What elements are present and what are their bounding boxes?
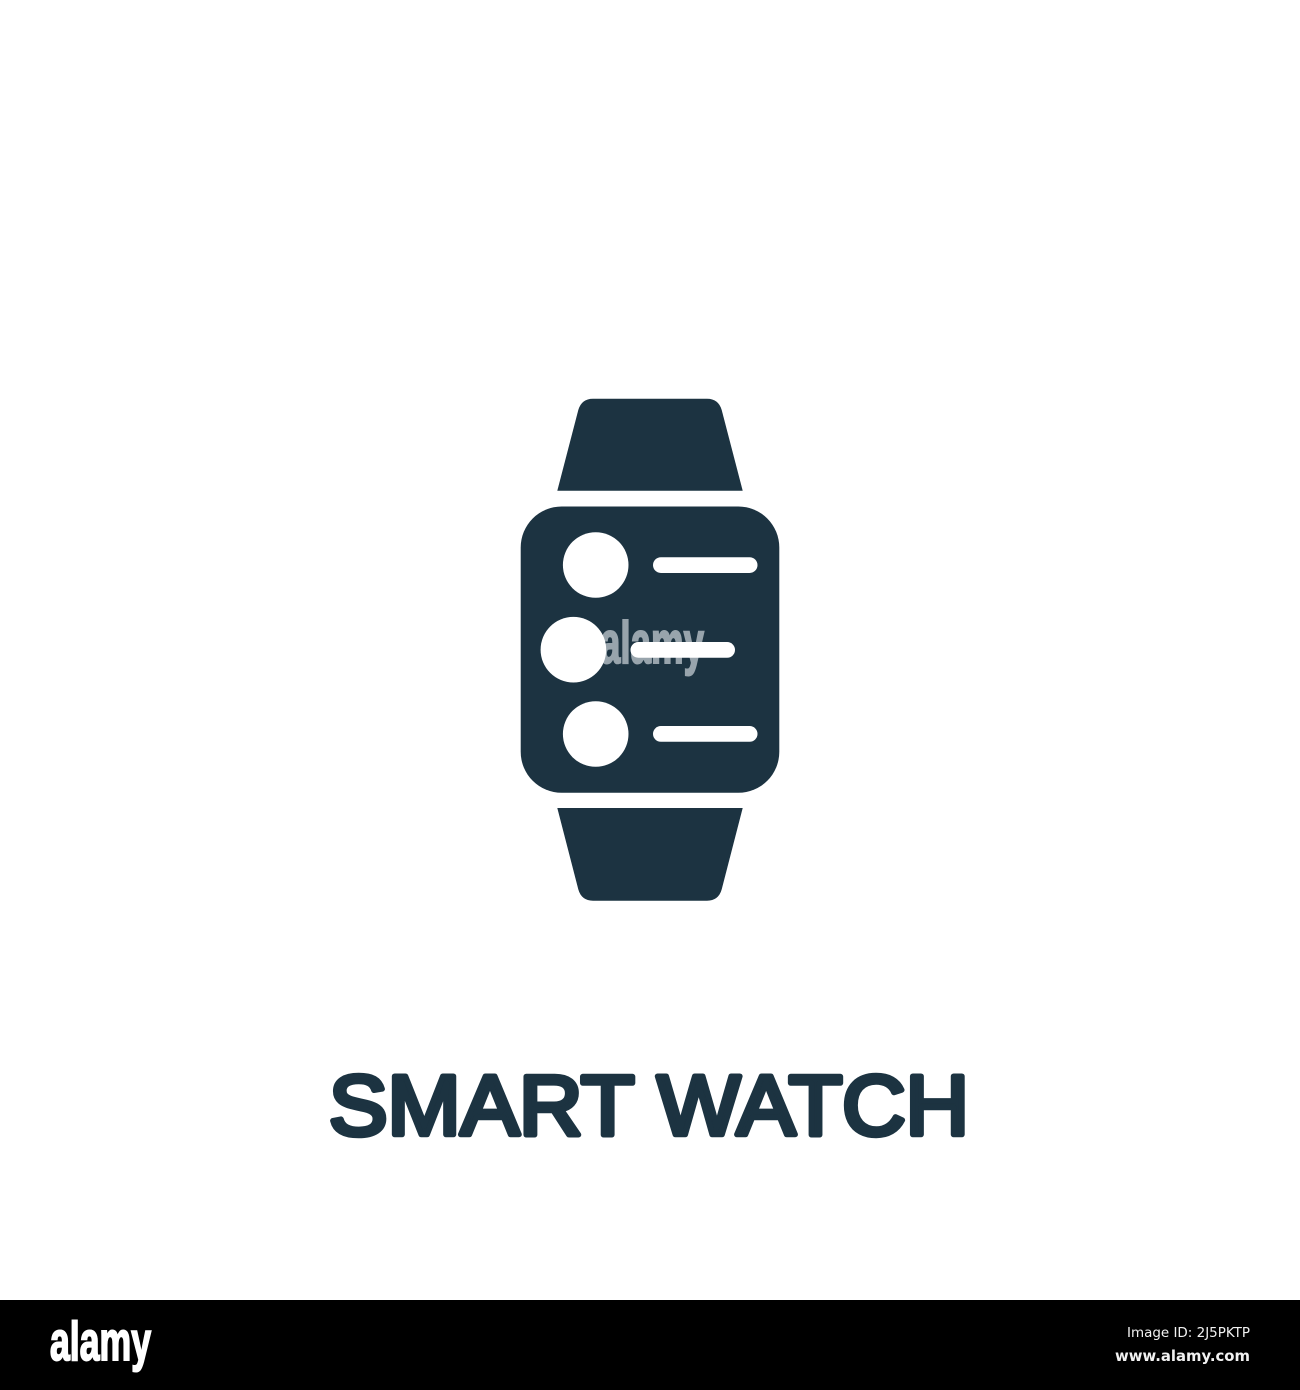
top strap (557, 399, 743, 491)
title: SMART WATCH (329, 1059, 969, 1153)
footer bar (0, 1300, 1300, 1390)
bottom strap (557, 808, 743, 901)
watermark: alamy centre: alamy (600, 610, 704, 676)
icon: smart watch (521, 399, 779, 901)
list row 2 (541, 617, 735, 682)
list row 1 (563, 532, 758, 598)
image id: Image ID: 2J5PKTP (1127, 1326, 1250, 1341)
website: www.alamy.com (1115, 1347, 1250, 1365)
footer logo: alamy: alamy (50, 1310, 151, 1372)
list row 3 (563, 701, 758, 767)
watch body (521, 506, 779, 793)
